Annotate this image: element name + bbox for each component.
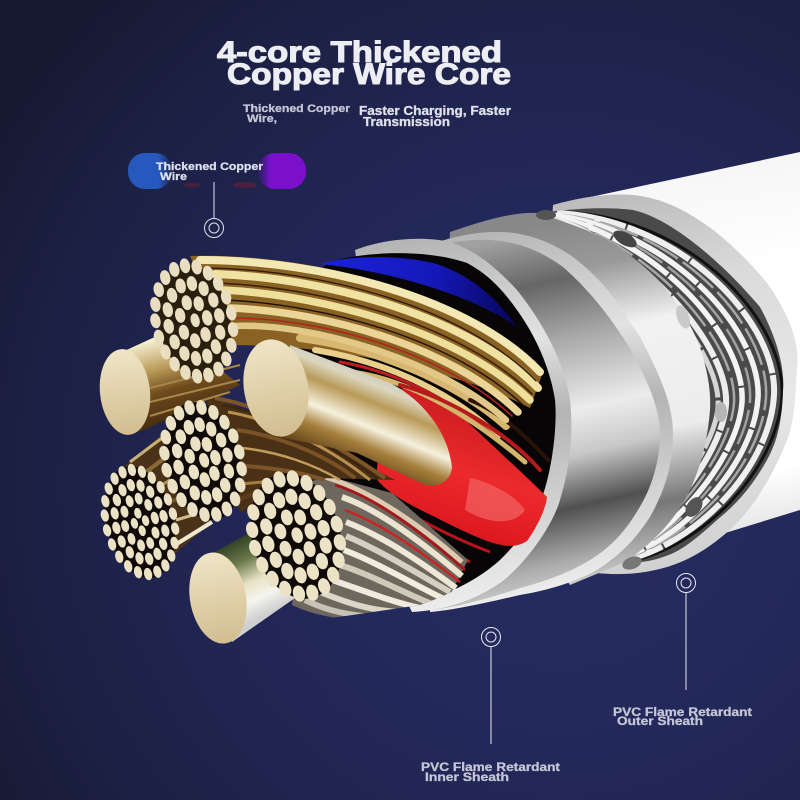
strand bundle: middle <box>153 394 253 528</box>
title: 4-core Thickened <box>217 36 502 69</box>
blue insulated core <box>320 257 517 327</box>
target marker <box>482 628 500 646</box>
faint smudges <box>184 182 257 188</box>
strand bundle: left <box>94 459 186 585</box>
cable cross-section layers <box>280 194 798 612</box>
subtitle: thickened copper wire: Wire, <box>247 113 277 125</box>
callout label: Wire <box>160 171 187 183</box>
label: Inner Sheath <box>425 770 509 784</box>
blue pill <box>128 153 172 189</box>
title <box>217 36 511 91</box>
subtitle: thickened copper wire <box>243 103 351 125</box>
mouth interior <box>280 253 556 600</box>
solid left copper wire <box>96 330 240 437</box>
label: PVC Flame Retardant <box>613 705 752 719</box>
red insulated core <box>360 388 547 562</box>
label <box>613 705 752 728</box>
silver inner sheath cylinder <box>420 240 660 610</box>
title: Copper Wire Core <box>227 58 511 91</box>
subtitle: faster charging: Transmission <box>363 115 450 129</box>
outer sheath cut ring <box>540 194 798 574</box>
subtitle: thickened copper wire: Thickened Copper <box>243 103 351 115</box>
strand bundle: front <box>236 462 356 610</box>
braided shield <box>543 208 783 563</box>
silver strands of lower bundle <box>292 472 468 620</box>
dark red lower strands <box>360 490 490 562</box>
front rim <box>355 239 571 612</box>
central solid copper wire <box>236 334 452 486</box>
strands of left bundle <box>123 432 212 558</box>
wire strands <box>123 395 468 620</box>
target marker <box>204 218 224 238</box>
inner silver band <box>440 213 710 585</box>
top gold strands <box>190 256 548 470</box>
purple pill <box>258 153 306 189</box>
strand bundle: top <box>145 257 243 385</box>
label: Outer Sheath <box>617 714 703 728</box>
subtitle: faster charging: Faster Charging, Faster <box>359 104 511 118</box>
white outer cable <box>553 152 800 573</box>
callout: inner sheath <box>421 628 560 784</box>
leader <box>685 593 687 690</box>
second rim <box>420 232 673 612</box>
callout: thickened copper wire <box>128 153 306 238</box>
label: PVC Flame Retardant <box>421 760 560 774</box>
lower gold and red strands <box>300 338 548 470</box>
target marker <box>676 574 696 592</box>
brown strands of middle bundle <box>205 395 395 512</box>
shield strand ends <box>536 210 727 572</box>
solid lower copper wire <box>182 528 295 648</box>
callout: outer sheath <box>613 574 752 728</box>
callout label: Thickened Copper <box>156 161 264 173</box>
subtitle: faster charging <box>359 104 511 129</box>
leader <box>490 647 492 744</box>
callout label <box>156 161 264 183</box>
label <box>421 760 560 784</box>
callout leader <box>213 182 215 218</box>
